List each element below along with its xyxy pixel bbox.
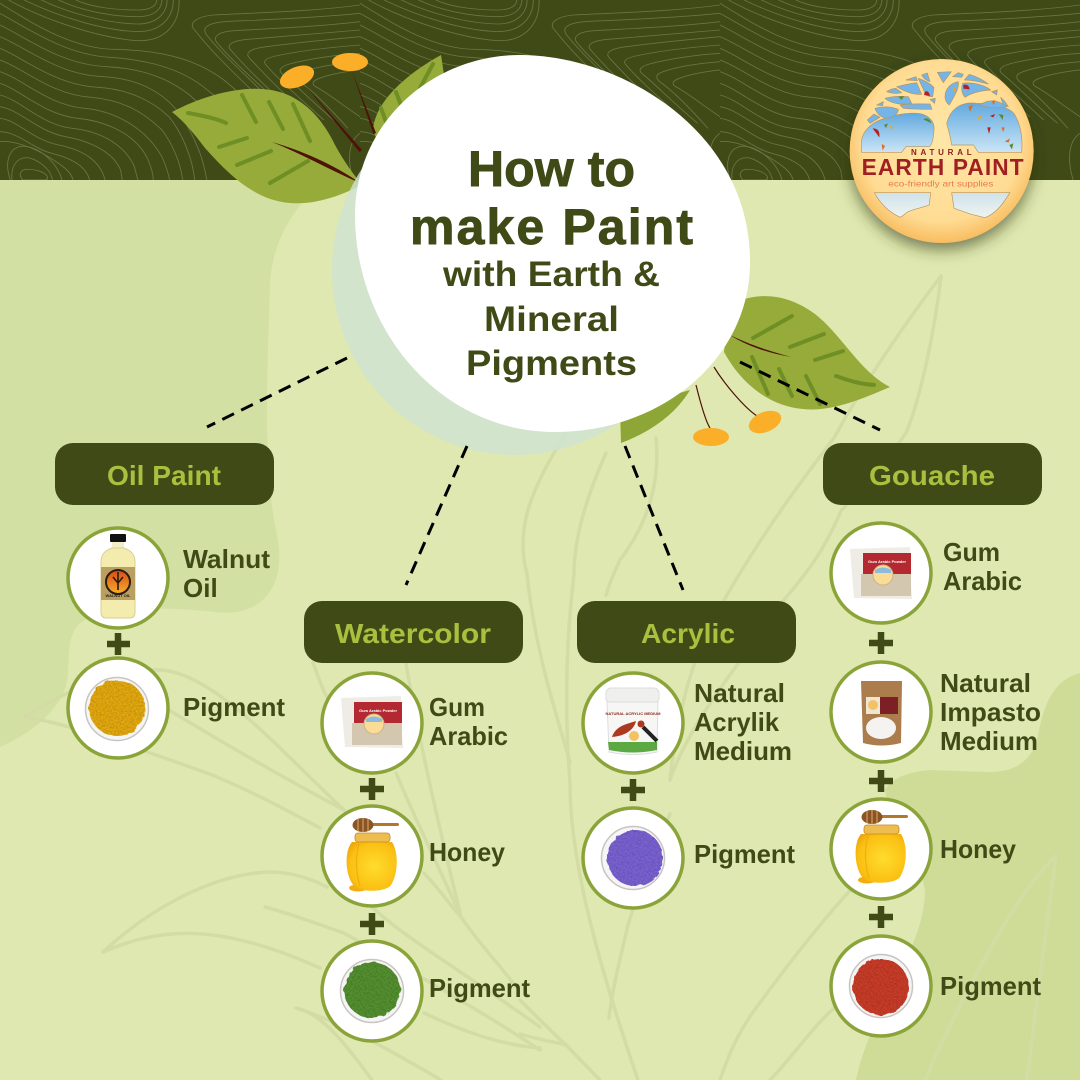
Gouache: honey — [831, 799, 931, 899]
Oil: yellow pigment — [68, 658, 168, 758]
Acrylic: medium label: Medium — [694, 736, 792, 766]
Gouache: impasto label: Medium — [940, 726, 1038, 756]
logo: Natural Earth Paint — [850, 59, 1034, 243]
pill: Gouache — [823, 443, 1042, 505]
logo: Natural Earth Paint: EARTH PAINT — [862, 154, 1024, 180]
white title circle — [355, 55, 750, 432]
leaf: lower right — [724, 296, 890, 409]
logo: Natural Earth Paint: NATURAL — [911, 148, 972, 157]
plus — [869, 632, 893, 654]
background blob: left — [0, 180, 325, 747]
dashed connectors — [207, 358, 880, 590]
Acrylic: medium tub — [583, 673, 683, 773]
pill: Oil Paint: Oil Paint — [107, 460, 221, 491]
Oil: walnut oil bottle: WALNUT OIL — [106, 593, 131, 598]
title: with Earth & — [442, 255, 660, 294]
flowers: lower — [693, 367, 785, 446]
background plant stems — [24, 276, 1056, 1080]
title: Mineral — [484, 300, 619, 339]
Acrylic: purple pigment — [583, 808, 683, 908]
Gouache: red pigment — [831, 936, 931, 1036]
dark top band — [0, 0, 1080, 180]
pill: Watercolor: Watercolor — [335, 618, 491, 649]
Watercolor: gum arabic label: Arabic — [429, 721, 508, 751]
Watercolor: gum arabic — [322, 673, 422, 773]
pill: Gouache: Gouache — [869, 460, 995, 491]
Gouache: gum arabic label: Arabic — [943, 566, 1022, 596]
Gouache: gum arabic label: Gum — [943, 537, 1000, 567]
Gouache: honey label: Honey — [940, 834, 1017, 864]
title: How to — [468, 141, 635, 197]
Watercolor: pigment label: Pigment — [429, 973, 530, 1003]
Gouache: gum arabic — [831, 523, 931, 623]
plus — [107, 633, 130, 655]
leaf: top left with stem — [172, 89, 362, 203]
Acrylic: medium tub: NATURAL ACRYLIC MEDIUM — [606, 711, 661, 716]
pale back circle — [332, 85, 698, 455]
Watercolor: honey label: Honey — [429, 837, 506, 867]
leaf: top behind circle — [373, 55, 446, 160]
Gouache: pigment label: Pigment — [940, 971, 1041, 1001]
Oil: walnut oil label: Oil — [183, 573, 218, 603]
pill: Acrylic: Acrylic — [641, 618, 735, 649]
Watercolor: green pigment — [322, 941, 422, 1041]
title — [410, 141, 693, 383]
Gouache: impasto medium bag — [831, 662, 931, 762]
title: make Paint — [410, 199, 693, 255]
Gouache: impasto label: Impasto — [940, 697, 1041, 727]
Acrylic: medium label: Natural — [694, 678, 785, 708]
pill: Watercolor — [304, 601, 523, 663]
logo: Natural Earth Paint: eco-friendly art supplies — [888, 179, 994, 189]
Oil: walnut oil label: Walnut — [183, 544, 270, 574]
Gouache: gum arabic: Gum Arabic Powder — [868, 559, 906, 564]
leaf: small lower — [620, 390, 690, 443]
title: Pigments — [466, 344, 637, 383]
Watercolor: honey — [322, 806, 422, 906]
Watercolor: gum arabic: Gum Arabic Powder — [359, 708, 397, 713]
flowers: top left — [277, 53, 376, 152]
Gouache: impasto label: Natural — [940, 668, 1031, 698]
Oil: walnut oil bottle — [68, 528, 168, 628]
plus — [360, 913, 384, 935]
Oil: pigment label: Pigment — [183, 692, 285, 722]
pill: Acrylic — [577, 601, 796, 663]
plus — [621, 779, 645, 801]
plus — [360, 778, 384, 800]
background blob: bottom right — [856, 673, 1080, 1080]
plus — [869, 770, 893, 792]
Watercolor: gum arabic label: Gum — [429, 692, 485, 722]
pill: Oil Paint — [55, 443, 274, 505]
Acrylic: medium label: Acrylik — [694, 707, 780, 737]
Acrylic: pigment label: Pigment — [694, 839, 795, 869]
plus — [869, 906, 893, 928]
